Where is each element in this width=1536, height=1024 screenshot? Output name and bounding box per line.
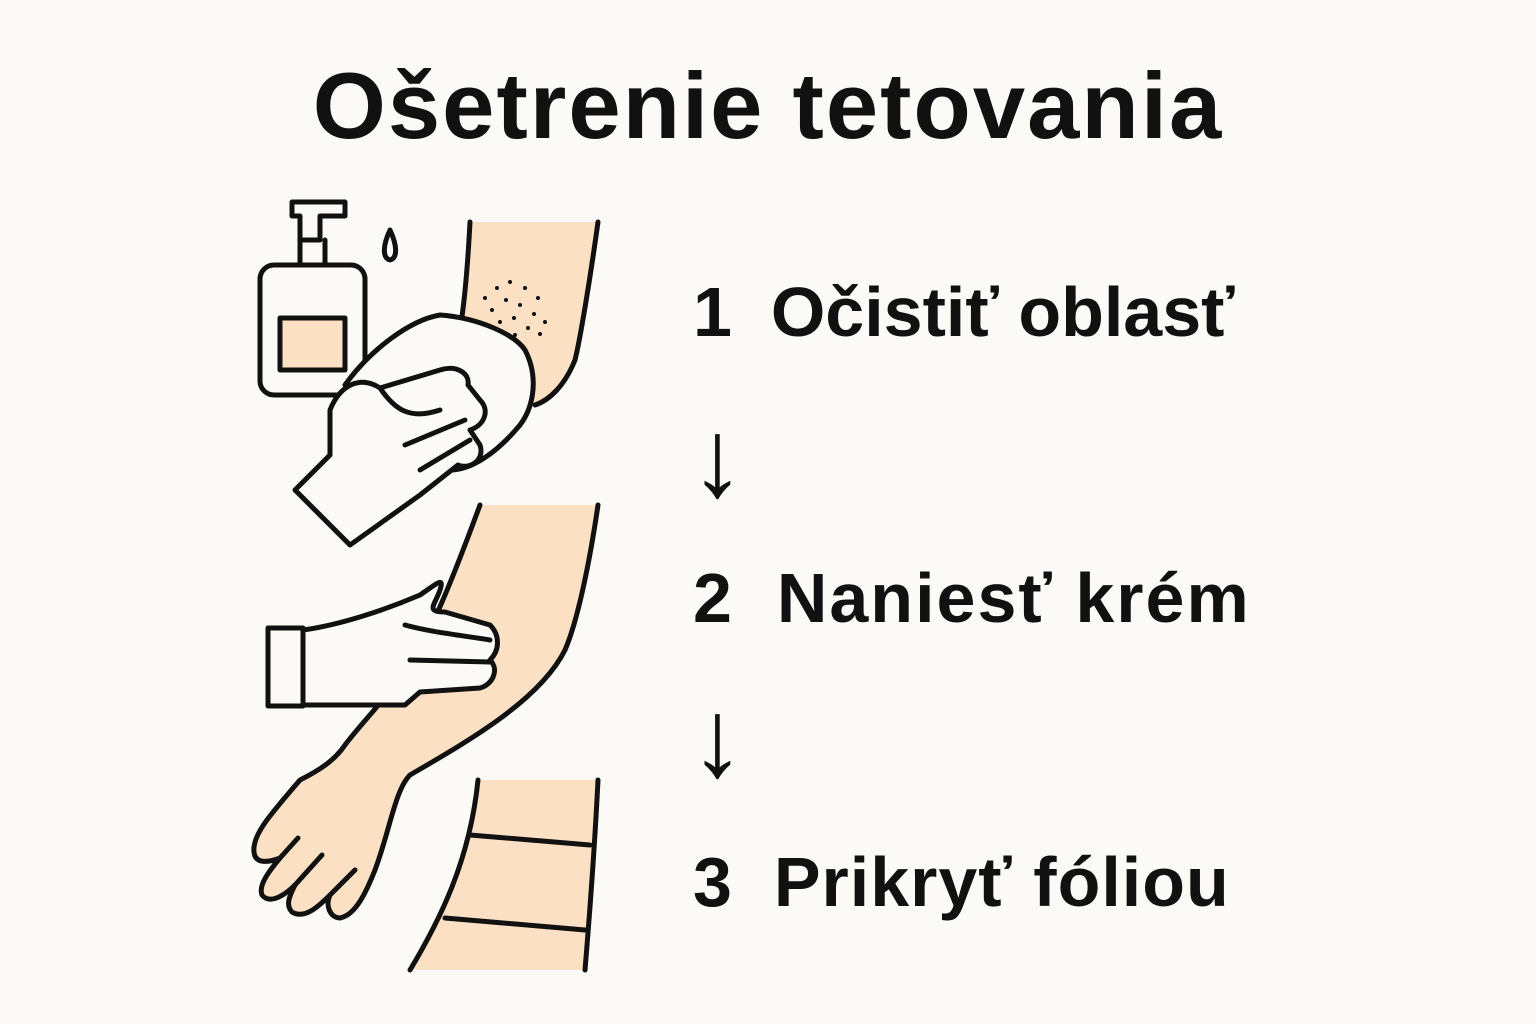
icon: hand with cloth [295,315,533,545]
icon: upper arm with tattoo [460,222,598,405]
illustration: step 3 film [410,780,598,970]
step 1 text: 1 Očistiť oblasť [693,273,1235,351]
icon: arm with hand [254,505,598,918]
icon: applying hand [268,582,498,706]
arrow 2: ↓ [690,677,745,800]
arrow 1: ↓ [690,397,745,520]
step 2 text: 2 Naniesť krém [693,559,1251,637]
illustration: step 1 cleaning [260,202,598,545]
title: Ošetrenie tetovania [313,53,1223,158]
icon: soap bottle [260,202,396,395]
illustration: step 2 cream [254,505,598,918]
step 3 text: 3 Prikryť fóliou [693,843,1230,921]
